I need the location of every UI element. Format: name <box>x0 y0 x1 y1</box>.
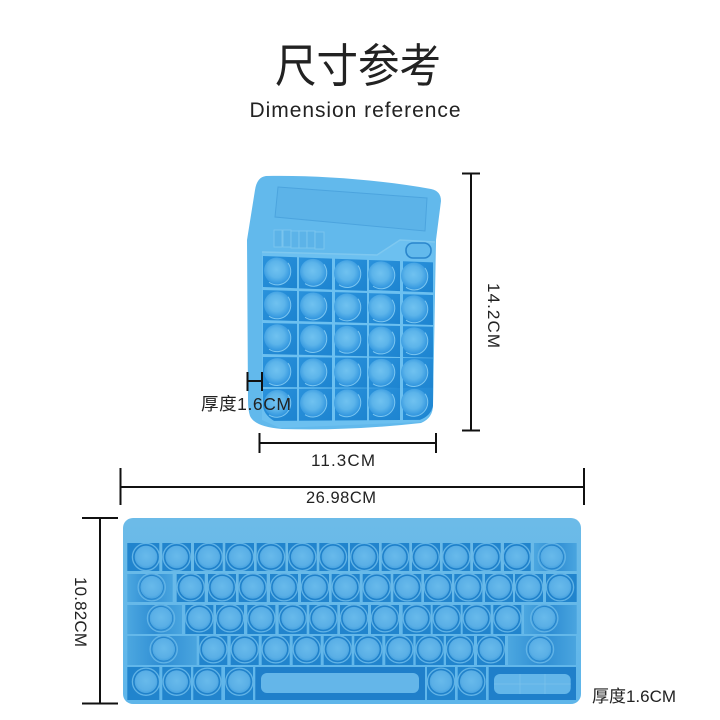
height dimension: 10.82CM: 10.82CM <box>71 577 90 647</box>
calculator body <box>247 176 441 429</box>
height dimension: 14.2CM <box>462 173 503 431</box>
thickness dimension: calculator <box>201 372 291 414</box>
keyboard row 3 <box>127 605 577 634</box>
title: 尺寸参考 <box>275 40 441 92</box>
width dimension: 11.3CM: 11.3CM <box>311 451 375 470</box>
width dimension: 26.98CM <box>120 468 584 507</box>
calculator pop-it toy <box>247 176 441 429</box>
calculator bubble keys <box>263 256 433 421</box>
keyboard pop-it toy <box>123 518 581 704</box>
height dimension: 14.2CM: 14.2CM <box>484 283 503 348</box>
width dimension: 11.3CM <box>260 433 436 470</box>
thickness label: keyboard: 厚度1.6CM <box>592 687 676 706</box>
keyboard row 2 <box>127 574 577 602</box>
keyboard row 5 <box>127 667 486 700</box>
keyboard body <box>123 518 581 704</box>
thickness dimension: calculator: 厚度1.6CM <box>201 394 291 414</box>
keyboard row 4 <box>127 636 576 665</box>
calculator vents <box>274 230 324 249</box>
width dimension: 26.98CM: 26.98CM <box>306 489 376 507</box>
calculator button <box>406 243 431 258</box>
height dimension: 10.82CM <box>71 518 118 704</box>
calculator panel line <box>262 240 435 255</box>
keyboard row 1 <box>127 543 577 571</box>
calculator display <box>275 187 427 231</box>
keyboard space bar <box>255 667 425 700</box>
subtitle: Dimension reference <box>250 99 460 122</box>
keyboard arrow keys <box>489 667 576 700</box>
